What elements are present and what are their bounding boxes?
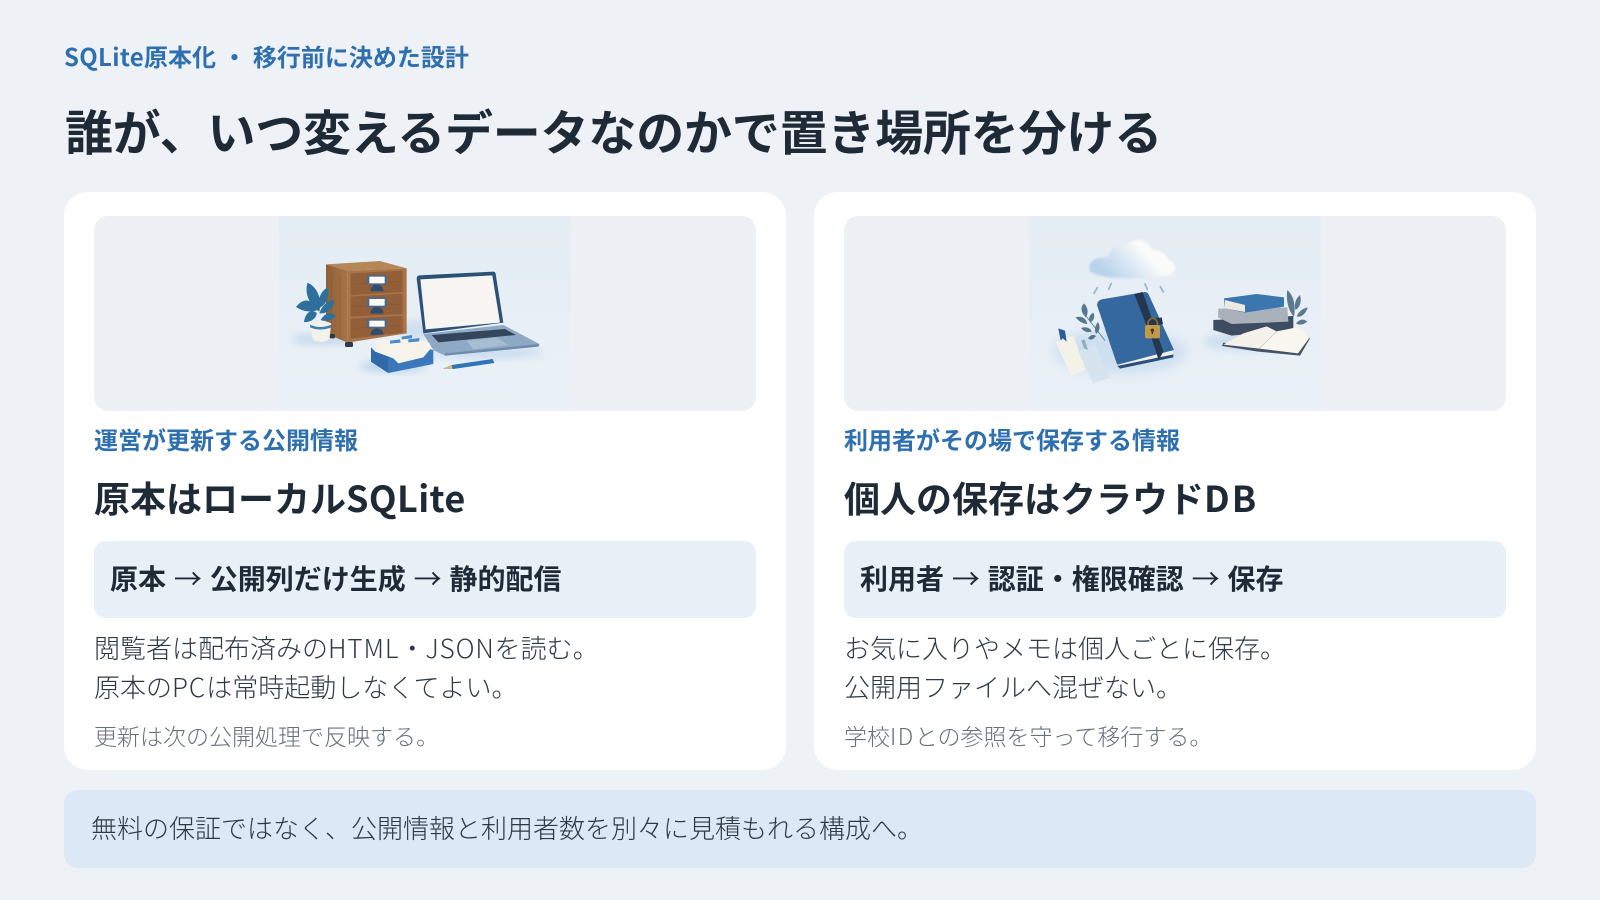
note: 学校IDとの参照を守って移行する。 <box>844 718 1212 752</box>
kicker: SQLite原本化 ・ 移行前に決めた設計 <box>64 38 469 73</box>
heading: 原本はローカルSQLite <box>94 471 466 523</box>
body text <box>844 629 1286 705</box>
illustration: cloud, locked notebook and books <box>844 216 1506 411</box>
flow strip: 利用者 → 認証・権限確認 → 保存 <box>860 558 1283 598</box>
label: 運営が更新する公開情報 <box>94 421 358 456</box>
flow strip <box>94 541 756 618</box>
label: 利用者がその場で保存する情報 <box>844 421 1180 456</box>
book stack <box>1287 290 1308 325</box>
body text: 原本のPCは常時起動しなくてよい。 <box>94 668 517 705</box>
bookmarks <box>1056 336 1086 375</box>
card box <box>376 338 430 364</box>
title: 誰が、いつ変えるデータなのかで置き場所を分ける <box>65 94 1162 164</box>
illustration: cabinet and laptop <box>94 216 756 411</box>
callout text: 無料の保証ではなく、公開情報と利用者数を別々に見積もれる構成へ。 <box>91 809 923 846</box>
leaves <box>1084 313 1105 341</box>
plant <box>296 283 336 322</box>
notebook <box>1118 350 1173 368</box>
panel: cloud DB <box>814 192 1536 770</box>
body text <box>94 629 599 705</box>
body text: お気に入りやメモは個人ごとに保存。 <box>844 629 1286 666</box>
flow strip: 原本 → 公開列だけ生成 → 静的配信 <box>110 558 561 598</box>
cloud <box>1089 240 1175 279</box>
open book <box>1222 337 1310 356</box>
body text: 公開用ファイルへ混ぜない。 <box>844 668 1182 705</box>
pencil <box>443 359 494 369</box>
note: 更新は次の公開処理で反映する。 <box>94 718 439 752</box>
heading: 個人の保存はクラウドDB <box>844 471 1258 523</box>
laptop <box>423 325 539 356</box>
padlock <box>1148 318 1157 325</box>
cabinet <box>326 261 407 271</box>
body text: 閲覧者は配布済みのHTML・JSONを読む。 <box>94 629 599 666</box>
panel: local SQLite <box>64 192 786 770</box>
footer callout <box>64 790 1536 868</box>
flow strip <box>844 541 1506 618</box>
